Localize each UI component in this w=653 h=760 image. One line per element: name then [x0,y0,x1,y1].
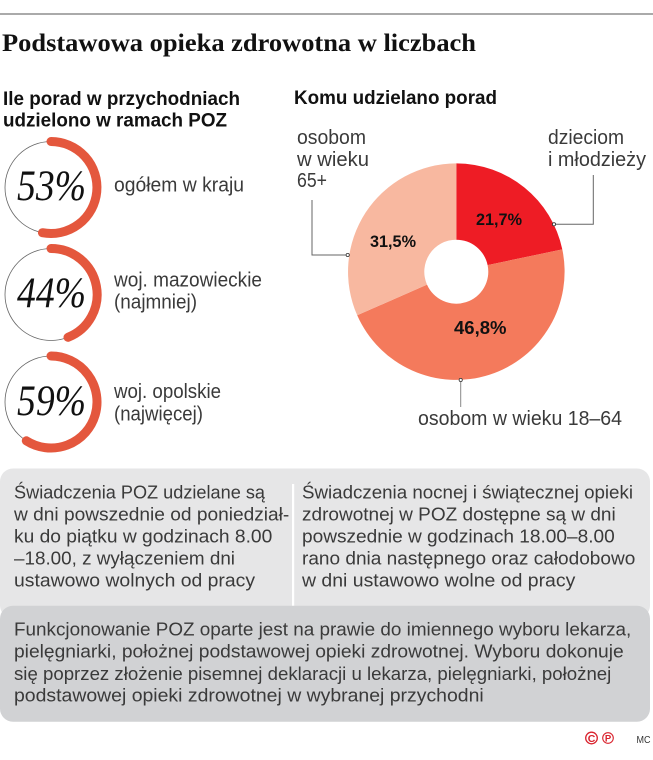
ring label: 59%: (najwięcej) [114,404,203,426]
panel: opening hours [0,468,650,618]
heading: number of consultations: udzielono w ramach POZ [3,110,227,132]
leader line: 65+ [312,200,349,257]
leader line: 18-64 [459,378,462,407]
slice: 21,7% [456,163,562,265]
label: children: dzieciom [548,127,624,149]
ring stat: 53% [5,142,97,234]
text: night care [301,481,635,591]
text: daytime care: –18.00, z wyłączeniem dni [14,547,235,568]
text: choice of doctor: podstawowej opieki zdrowotnej w wybranej przychodni [14,685,484,706]
ring label: 59%: woj. opolskie [113,381,221,403]
label: 18-64: osobom w wieku 18–64 [418,408,622,430]
value: 46,8%: 46,8% [454,317,506,338]
ring stat: 44% [5,248,97,340]
label: 65+: 65+ [297,170,327,192]
ring label: 53%: ogółem w kraju [114,174,244,196]
ring label: 44%: woj. mazowieckie [113,270,262,292]
text: daytime care: w dni powszednie od poniedział- [13,503,289,524]
ring label: 44%: (najmniej) [114,292,197,314]
text: night care: zdrowotnej w POZ dostępne są w dni [302,503,616,524]
credit: MC: MC [636,735,650,746]
slice: 46,8% [357,249,565,380]
title: Podstawowa opieka zdrowotna w liczbach [2,28,476,57]
ring stat: 53%: 53% [17,163,86,210]
text: daytime care [13,481,289,591]
text: choice of doctor: Funkcjonowanie POZ oparte jest na prawie do imiennego wyboru lekarza, [14,619,631,640]
text: night care: powszednie w godzinach 18.00–8.00 [302,525,615,546]
ring stat: 59%: 59% [17,378,86,425]
ring stat: 59% [5,356,97,448]
leader line: children [552,175,593,226]
ring label: 59% [113,381,221,426]
label: 65+ [296,127,369,192]
text: choice of doctor: się poprzez złożenie pisemnej deklaracji u lekarza, pielęgniarki, położnej [14,663,611,684]
logo: CP: P [605,734,612,745]
value: 21,7%: 21,7% [476,210,522,229]
label: 65+: w wieku [296,149,369,171]
heading: number of consultations [3,89,240,132]
text: daytime care: Świadczenia POZ udzielane są [14,481,266,502]
text: daytime care: ku do piątku w godzinach 8.00 [14,525,272,546]
text: choice of doctor [14,619,631,706]
label: children [548,127,646,171]
donut chart [348,163,565,380]
ring stat: 44%: 44% [17,270,86,317]
logo: CP [586,732,613,745]
text: night care: rano dnia następnego oraz całodobowo [302,547,635,568]
text: daytime care: ustawowo wolnych od pracy [14,570,256,591]
text: night care: Świadczenia nocnej i świątecznej opieki [302,481,633,502]
heading: recipients: Komu udzielano porad [294,88,497,109]
ring label: 44% [113,270,262,314]
text: night care: w dni ustawowo wolne od pracy [301,570,576,591]
logo: CP: C [588,733,596,745]
heading: number of consultations: Ile porad w przychodniach [3,89,240,110]
label: children: i młodzieży [548,149,646,171]
slice: 31,5% [348,163,456,315]
panel: choice of doctor [0,606,650,722]
label: 65+: osobom [297,127,366,149]
text: choice of doctor: pielęgniarki, położnej podstawowej opieki zdrowotnej. Wyboru dokonuje [14,641,624,662]
value: 31,5%: 31,5% [370,232,416,251]
